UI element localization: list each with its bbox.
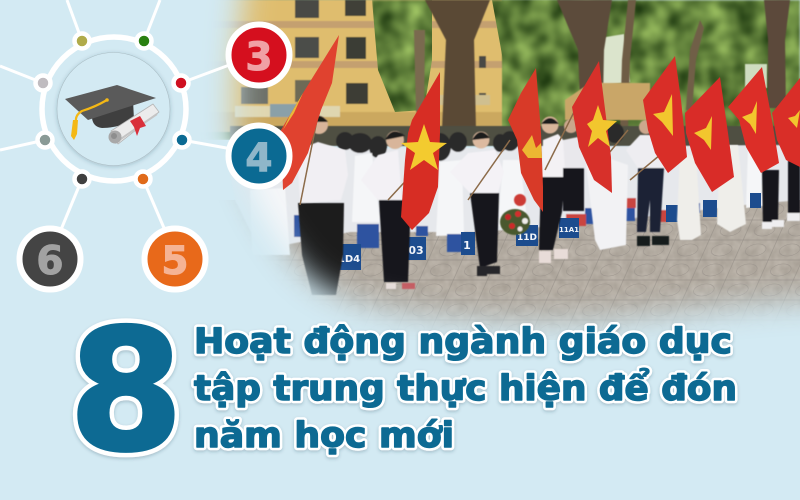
girl 7 — [677, 155, 701, 240]
node red — [174, 76, 188, 90]
Vietnamese flags — [281, 35, 800, 230]
node orange — [136, 172, 150, 186]
title line 2: tập trung thực hiện để đón — [194, 367, 737, 409]
student 4 — [539, 116, 572, 263]
student 9 — [762, 170, 784, 229]
badge 4 — [228, 126, 290, 186]
badge 3: 3 — [245, 35, 273, 80]
icon: graduation cap and diploma — [65, 85, 159, 144]
title line 3: năm học mới — [194, 416, 454, 456]
sign 1: 1 — [463, 239, 471, 252]
big number 8: 8 — [69, 294, 183, 489]
flower basket — [500, 194, 530, 235]
flag 5 — [643, 56, 687, 173]
sign 03: 03 — [408, 244, 424, 257]
flag 2 — [401, 72, 447, 230]
node blue — [174, 132, 190, 148]
student 1 — [297, 116, 348, 295]
flag 3 — [508, 68, 543, 212]
seated crowd in white ao dai — [225, 123, 800, 255]
sign 1D4: 1D4 — [338, 254, 360, 265]
badge 3 — [228, 24, 290, 86]
diploma scroll — [108, 104, 159, 144]
standing students — [297, 116, 800, 295]
node green — [136, 34, 152, 48]
title — [194, 322, 737, 456]
sign 03 — [408, 237, 426, 260]
badge 6 — [20, 228, 80, 290]
flag 6 — [685, 77, 734, 192]
girl 8 — [717, 145, 746, 232]
flag 8 — [772, 78, 800, 167]
outer white ring — [42, 37, 186, 181]
student 10 — [787, 158, 800, 221]
title line 1: Hoạt động ngành giáo dục — [194, 322, 732, 362]
badge 4: 4 — [245, 136, 273, 181]
title line 1: Hoạt động ngành giáo dục — [194, 322, 732, 362]
sign 11D: 11D — [517, 233, 537, 243]
student 6 — [626, 120, 669, 246]
flag poles — [300, 110, 660, 205]
cap board — [65, 85, 156, 120]
student 3 — [462, 130, 502, 277]
class name signs — [337, 193, 761, 270]
centre disc — [57, 52, 170, 166]
title line 3: năm học mới — [194, 416, 454, 456]
network diagram: connector lines — [0, 0, 232, 235]
tassel — [71, 98, 109, 140]
flag 1 — [281, 35, 339, 190]
title line 2: tập trung thực hiện để đón — [194, 367, 737, 409]
paved school yard — [268, 200, 800, 340]
flag 4 — [572, 61, 617, 193]
cap base — [92, 100, 134, 128]
big number 8: 8 — [69, 294, 183, 489]
flag 7 — [728, 67, 779, 173]
node grey green — [38, 132, 52, 148]
foliage — [372, 0, 560, 112]
sign 1 — [461, 232, 475, 255]
blue stools — [294, 203, 700, 252]
tree trunks — [414, 0, 790, 130]
badge 6: 6 — [36, 239, 64, 284]
sign 11A1: 11A1 — [559, 226, 579, 234]
node olive — [74, 34, 90, 48]
badge 5: 5 — [161, 239, 189, 284]
ring nodes — [36, 34, 190, 186]
photo background: sky, foliage and school building — [200, 0, 800, 140]
badge 5 — [144, 228, 206, 290]
photo: students with flags at the school opening ceremony — [200, 0, 800, 340]
tile pattern — [290, 204, 800, 326]
sign 1D4 — [340, 244, 361, 270]
sign 11D — [516, 225, 538, 246]
student 2 — [374, 130, 416, 290]
node dark — [74, 172, 90, 186]
student 5 — [563, 119, 586, 211]
student in white ao dai — [586, 158, 628, 250]
node light grey — [36, 76, 50, 90]
sign 11A1 — [559, 218, 579, 238]
